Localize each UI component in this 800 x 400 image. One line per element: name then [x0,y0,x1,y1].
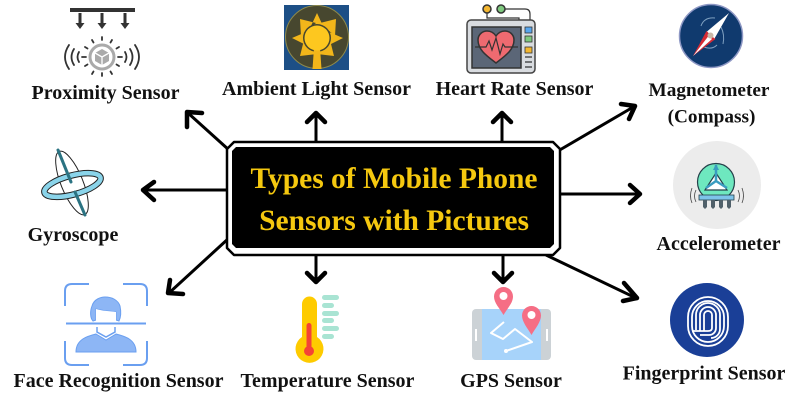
label: magnetometer: Magnetometer [649,80,770,101]
icon: GPS map phone [472,287,551,360]
arrow: to proximity sensor [187,112,229,150]
arrow: to ambient light sensor [307,113,325,141]
icon: thermometer [296,295,339,363]
icon: gyroscope [42,147,103,219]
title box [227,142,560,255]
icon: accelerometer [673,141,761,229]
label: GPS sensor: GPS Sensor [460,370,562,392]
icon: fingerprint [670,283,744,357]
icon: magnetometer compass [680,4,742,68]
arrow: to magnetometer [558,104,635,151]
label: proximity sensor: Proximity Sensor [32,82,180,104]
icon: heart rate monitor [467,5,535,73]
label: accelerometer: Accelerometer [657,233,781,255]
arrow: to face recognition sensor [168,238,229,294]
arrow: to heart rate sensor [493,113,511,141]
label: face recognition sensor: Face Recognition Sensor [14,370,224,392]
title text: Types of Mobile Phone [250,163,538,195]
arrow: to gyroscope [143,182,227,200]
label: ambient light sensor: Ambient Light Sensor [222,78,411,100]
label: temperature sensor: Temperature Sensor [241,370,415,392]
label: compass: (Compass) [668,106,755,128]
icon: ambient light sun [284,5,349,70]
arrow: to GPS sensor [494,255,512,282]
arrow: to accelerometer [560,185,640,203]
arrow: to fingerprint sensor [546,255,637,301]
label: fingerprint sensor: Fingerprint Sensor [623,362,786,384]
icon: face recognition [65,284,147,365]
label: heart rate sensor: Heart Rate Sensor [436,78,593,100]
label: gyroscope: Gyroscope [28,224,118,246]
arrow: to temperature sensor [307,255,325,282]
title text line 2: Sensors with Pictures [259,205,529,237]
icon: proximity sensor [65,8,139,76]
